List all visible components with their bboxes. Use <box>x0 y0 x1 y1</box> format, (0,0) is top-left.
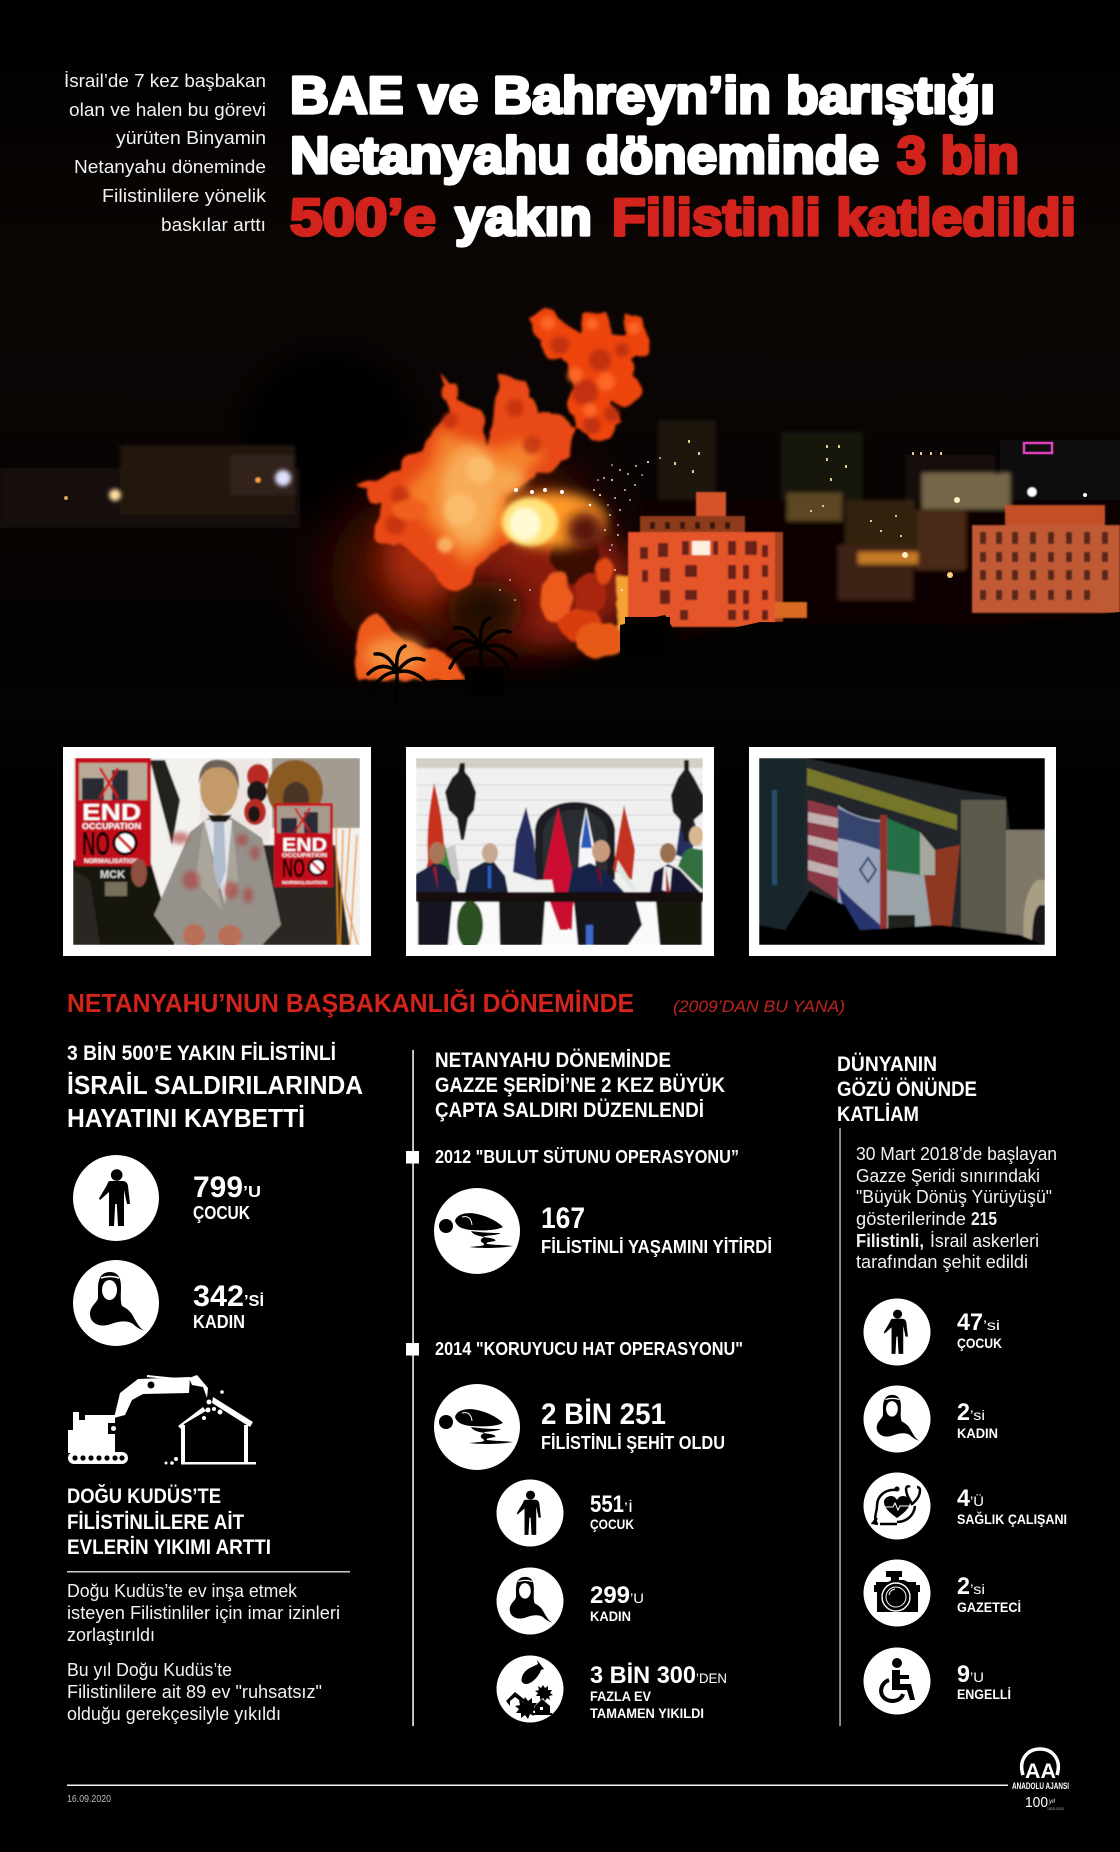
stat: 167 dead: 167 <box>541 1202 585 1235</box>
stat: 551 children: ÇOCUK <box>590 1516 634 1532</box>
text: building permits: Doğu Kudüs’te ev inşa etmek <box>67 1581 298 1601</box>
heading: East Jerusalem demolitions: EVLERİN YIKIMI ARTTI <box>67 1536 271 1559</box>
photo: protester wearing Netanyahu mask <box>63 747 371 956</box>
stat: 799 children: 799 <box>193 1171 243 1204</box>
stat: 47 children: ÇOCUK <box>957 1335 1002 1351</box>
stat: 299 women <box>590 1582 644 1624</box>
stat: 2 women <box>957 1399 998 1441</box>
flame inner glow <box>385 399 545 565</box>
text: Great March of Return <box>856 1144 1057 1272</box>
stat: 4 health workers <box>957 1485 1067 1527</box>
red paint stains <box>171 832 260 903</box>
date: 16.09.2020 <box>67 1794 111 1805</box>
door arch <box>535 802 615 880</box>
right apartment block <box>972 505 1120 613</box>
stat: 47 children <box>957 1309 1002 1351</box>
title: yakın <box>455 189 592 247</box>
photo: protester wearing Netanyahu mask: NO <box>282 853 305 883</box>
section heading: (2009’DAN BU YANA) <box>673 997 845 1016</box>
text: Great March of Return: gösterilerinde <box>856 1209 966 1229</box>
title: BAE ve Bahreyn’in barıştığı <box>290 67 995 125</box>
stat: 167 dead <box>541 1202 772 1257</box>
column 3 heading: DÜNYANIN <box>837 1053 937 1076</box>
projected flags <box>808 800 838 900</box>
palm trees <box>368 618 516 700</box>
lower-left fire <box>355 612 466 680</box>
intro text: baskılar arttı <box>161 215 266 235</box>
column 2 heading <box>435 1049 725 1122</box>
stat: 799 children: ÇOCUK <box>193 1203 250 1223</box>
column 3 heading <box>837 1053 977 1126</box>
column 1 heading: 3 BİN 500’E YAKIN FİLİSTİNLİ <box>67 1042 336 1065</box>
text: 89 houses demolished: olduğu gerekçesilyle yıkıldı <box>67 1704 281 1724</box>
title: 500’e <box>290 189 436 247</box>
flags <box>426 783 453 885</box>
heading: East Jerusalem demolitions: FİLİSTİNLİLERE AİT <box>67 1511 244 1534</box>
title: Filistinli katledildi <box>612 189 1076 247</box>
stat: 47 children: ’si <box>983 1317 1000 1333</box>
stat: 4 health workers: 4 <box>957 1485 971 1512</box>
city skyline <box>0 420 1120 660</box>
icon: child <box>864 1298 930 1366</box>
icon: victim <box>434 1188 520 1274</box>
logo: Anadolu Ajansı: AA <box>1025 1760 1056 1783</box>
text: building permits: isteyen Filistinliler için imar izinleri <box>67 1603 340 1623</box>
hands <box>183 924 205 946</box>
stat: 9 disabled: 9 <box>957 1661 970 1688</box>
icon: excavator demolishing a house <box>68 1375 256 1465</box>
stat: 551 children: 551 <box>590 1491 624 1518</box>
icon: woman <box>864 1386 930 1452</box>
icon: woman <box>496 1568 564 1634</box>
icon: child <box>73 1155 159 1241</box>
flame mass <box>358 373 573 590</box>
lower bodies <box>418 902 452 945</box>
photo: protester wearing Netanyahu mask: END <box>282 835 327 855</box>
stat: 2 journalists: 2 <box>957 1573 970 1600</box>
stat: 342 women: KADIN <box>193 1312 245 1332</box>
table <box>416 892 703 902</box>
stat: 167 dead: FİLİSTİNLİ YAŞAMINI YİTİRDİ <box>541 1237 772 1257</box>
stat: 9 disabled: ’U <box>970 1669 984 1685</box>
intro text: Netanyahu döneminde <box>74 157 266 177</box>
photo: protester wearing Netanyahu mask: NORMALISATION <box>282 880 327 885</box>
stat: 9 disabled: ENGELLİ <box>957 1686 1011 1702</box>
operation 2012: 2012 "BULUT SÜTUNU OPERASYONU” <box>435 1147 739 1167</box>
column 1 heading <box>67 1042 363 1133</box>
text: Great March of Return: tarafından şehit edildi <box>856 1252 1028 1272</box>
column 1 heading: HAYATINI KAYBETTİ <box>67 1103 305 1133</box>
orange building hit by light <box>628 492 807 627</box>
logo: Anadolu Ajansı: 1920-2020 <box>1047 1807 1064 1811</box>
photo: protester wearing Netanyahu mask: MCK <box>100 869 125 881</box>
operation 2014: 2014 "KORUYUCU HAT OPERASYONU" <box>435 1339 743 1359</box>
title: 3 bin <box>897 127 1019 185</box>
stat: 2 women: 2 <box>957 1399 970 1426</box>
logo: Anadolu Ajansı <box>1012 1749 1069 1811</box>
stat: 342 women <box>193 1280 264 1332</box>
foreground silhouettes <box>0 612 1120 790</box>
plume puffs <box>541 316 640 434</box>
sign left <box>75 758 151 866</box>
suit <box>154 818 281 945</box>
photo: protester wearing Netanyahu mask: OCCUPATION <box>82 822 141 831</box>
intro text: olan ve halen bu görevi <box>69 100 266 120</box>
icon: wheelchair <box>864 1648 930 1714</box>
icon: stethoscope and heart <box>864 1472 930 1540</box>
stat: 47 children: 47 <box>957 1309 983 1336</box>
woman hair <box>267 760 323 820</box>
stat: 3300 houses destroyed: TAMAMEN YIKILDI <box>590 1705 704 1721</box>
flame plume <box>529 307 650 447</box>
stat: 551 children <box>590 1491 634 1532</box>
stat: 3300 houses destroyed: FAZLA EV <box>590 1688 652 1704</box>
hero photo: explosion over Gaza at night <box>0 0 1120 790</box>
text: building permits <box>67 1581 340 1645</box>
column 3: Great March of Return <box>837 1053 1067 1726</box>
logo: Anadolu Ajansı: 100 <box>1025 1794 1048 1811</box>
stat: 299 women: 299 <box>590 1582 630 1609</box>
stat: 2 journalists: GAZETECİ <box>957 1599 1021 1615</box>
section heading: NETANYAHU’NUN BAŞBAKANLIĞI DÖNEMİNDE <box>67 988 634 1018</box>
stone towers <box>961 800 1006 945</box>
yellow-green band <box>807 768 957 830</box>
lanterns <box>445 763 476 840</box>
icon: victim <box>434 1384 520 1470</box>
stat: 9 disabled <box>957 1661 1011 1702</box>
icon: bomb and destroyed houses <box>496 1656 564 1722</box>
text: Great March of Return: 215 <box>971 1209 997 1229</box>
icon: camera <box>864 1560 930 1626</box>
photo: protester wearing Netanyahu mask: OCCUPATION <box>282 853 327 859</box>
stat: 2 women: ’si <box>970 1407 985 1423</box>
stat: 2 women: KADIN <box>957 1425 998 1441</box>
stat: 2 journalists <box>957 1573 1021 1615</box>
text: Great March of Return: 30 Mart 2018’de başlayan <box>856 1144 1057 1164</box>
text: building permits: zorlaştırıldı <box>67 1625 155 1645</box>
mask face <box>200 761 238 815</box>
photo: Abraham Accords signing at the White House <box>406 747 714 956</box>
stat: 342 women: 342 <box>193 1280 244 1313</box>
photo: protester wearing Netanyahu mask: NORMALISATION <box>84 859 138 865</box>
text: Great March of Return: Gazze Şeridi sınırındaki <box>856 1166 1040 1186</box>
stat: 2 journalists: ’si <box>970 1581 985 1597</box>
icon: child <box>496 1480 564 1546</box>
sign right <box>274 803 333 887</box>
stat: 551 children: ’İ <box>624 1498 633 1515</box>
people <box>416 862 458 892</box>
dark fire body below the fireball <box>475 525 635 645</box>
heading: East Jerusalem demolitions: DOĞU KUDÜS’TE <box>67 1484 221 1508</box>
icon: woman <box>73 1260 159 1346</box>
column 1: death toll <box>67 1042 363 1724</box>
stat: 2251 dead: 2 BİN 251 <box>541 1398 666 1431</box>
stat: 3300 houses destroyed <box>590 1662 727 1721</box>
fire glow <box>330 500 470 650</box>
text: Great March of Return: İsrail askerleri <box>930 1231 1039 1251</box>
stat: 3300 houses destroyed: ’DEN <box>696 1670 727 1686</box>
title: Netanyahu döneminde <box>290 127 879 185</box>
column 2: Gaza operations <box>406 1049 772 1726</box>
column 2 heading: GAZZE ŞERİDİ’NE 2 KEZ BÜYÜK <box>435 1074 725 1097</box>
stat: 299 women: KADIN <box>590 1608 631 1624</box>
photo: protester wearing Netanyahu mask: NO <box>82 825 110 862</box>
text: Great March of Return: Filistinli, <box>856 1231 924 1251</box>
column 3 heading: KATLİAM <box>837 1103 919 1126</box>
photo: protester wearing Netanyahu mask: END <box>82 799 141 825</box>
column 3 heading: GÖZÜ ÖNÜNDE <box>837 1078 977 1101</box>
stat: 799 children <box>193 1171 261 1223</box>
text: Great March of Return: "Büyük Dönüş Yürüyüşü" <box>856 1187 1052 1207</box>
column 1 heading: İSRAİL SALDIRILARINDA <box>67 1070 363 1100</box>
intro text: Filistinlilere yönelik <box>102 186 267 206</box>
logo: Anadolu Ajansı: yıl <box>1048 1799 1056 1805</box>
text: 89 houses demolished <box>67 1660 322 1724</box>
stat: 342 women: ’Sİ <box>244 1292 264 1310</box>
sparks <box>499 457 666 611</box>
column 2 heading: ÇAPTA SALDIRI DÜZENLENDİ <box>435 1099 704 1122</box>
logo: Anadolu Ajansı: ANADOLU AJANSI <box>1012 1781 1069 1791</box>
stat: 4 health workers: SAĞLIK ÇALIŞANI <box>957 1510 1067 1527</box>
fireball <box>498 492 606 548</box>
stat: 299 women: ’U <box>630 1590 644 1606</box>
text: 89 houses demolished: Filistinlilere ait 89 ev "ruhsatsız" <box>67 1682 322 1702</box>
stat: 2251 dead <box>541 1398 725 1453</box>
text: 89 houses demolished: Bu yıl Doğu Kudüs’te <box>67 1660 232 1680</box>
stat: 3300 houses destroyed: 3 BİN 300 <box>590 1662 696 1689</box>
trees <box>759 890 1045 945</box>
intro text <box>64 71 267 235</box>
intro text: İsrail’de 7 kez başbakan <box>64 71 266 91</box>
stat: 4 health workers: ’Ü <box>970 1492 984 1509</box>
intro text: yürüten Binyamin <box>116 128 266 148</box>
heading: East Jerusalem demolitions <box>67 1484 271 1559</box>
stat: 799 children: ’U <box>243 1184 261 1201</box>
column 2 heading: NETANYAHU DÖNEMİNDE <box>435 1049 671 1072</box>
photo: flags projected on Jerusalem old city walls <box>749 747 1056 956</box>
title <box>290 67 1076 247</box>
stat: 2251 dead: FİLİSTİNLİ ŞEHİT OLDU <box>541 1433 725 1453</box>
